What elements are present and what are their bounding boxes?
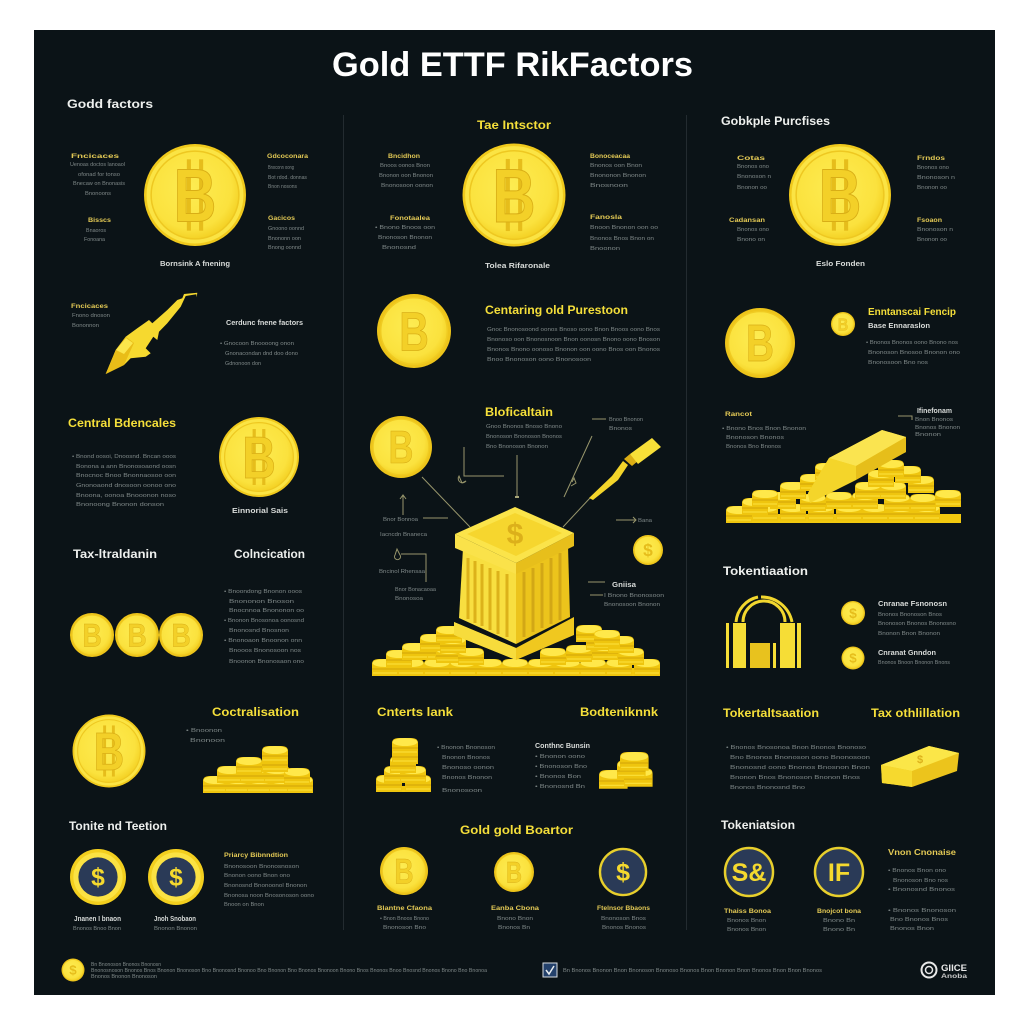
text: second: Cnranat Gnndon — [878, 650, 936, 657]
coin: small — [831, 312, 855, 336]
coin: small right — [633, 535, 663, 565]
heading: bottom bank: Bodteniknnk — [580, 705, 658, 719]
text: first: Bnonoson Bnonos Bnonosno — [878, 621, 956, 627]
logo — [922, 962, 968, 980]
coin: small right: $ — [643, 540, 653, 560]
dollar coin captions: Jnanen I bnaon — [74, 916, 121, 923]
callouts right — [917, 155, 955, 243]
text: rancot: Rancot — [725, 411, 753, 418]
coin: small two — [842, 646, 864, 670]
callouts right: Bnonoson n — [917, 227, 953, 233]
icon: gold ingot — [881, 746, 959, 787]
heading: gold gold boartor: Gold gold Boartor — [460, 823, 573, 837]
callout labels around the vault: Bnonosoon Bnonon — [604, 602, 660, 608]
footer — [62, 958, 968, 982]
token badge one: S& — [732, 859, 766, 887]
callouts left of coin: Fncicaces — [71, 153, 120, 160]
icon: gold coin pile — [203, 746, 313, 793]
callouts right: Bnonos oon Bnon — [590, 163, 642, 169]
coin one — [380, 847, 428, 895]
text: collocation list: Bnocnnoa Bnononon oo — [229, 608, 304, 614]
panel: central balances — [68, 416, 299, 515]
callouts right of coin: Bnon nosons — [268, 184, 297, 190]
panel: complex purchases — [721, 114, 961, 523]
heading: centering gold purestoon: Centaring old Purestoon — [485, 303, 628, 317]
text: pyramid list: • Bnonon Bnonoson — [437, 745, 495, 751]
callouts right of coin: Gacicos — [268, 215, 295, 222]
captions: Blantne Cfaona — [377, 905, 432, 912]
footer text left: Bnonos Bnonon Bnonoson — [91, 974, 157, 980]
token badge one — [725, 848, 773, 896]
text: collocation list: • Bnonon Bnosonoa oonosnd — [224, 618, 304, 624]
text: pyramid list: Bnonoso oonon — [442, 765, 494, 771]
text: paragraph: • Bnonos Bnosonoa Bnon Bnonos Bnonoso — [726, 745, 866, 751]
text: central balances list — [72, 454, 176, 508]
text: collocation list — [224, 589, 304, 665]
callouts left of coin: Fonoana — [84, 237, 106, 243]
coin: bitcoin large left: B — [174, 154, 216, 238]
text: collocation list: • Bnonoaon Bnoonon onn — [224, 638, 302, 644]
text: first — [878, 601, 956, 637]
callouts left: Bnonon oo — [737, 185, 767, 191]
coin one: B — [394, 851, 414, 891]
callout labels around the vault: Bnor Bonacaoaa — [395, 587, 437, 593]
heading: tokenisation: Tokeniatsion — [721, 818, 795, 832]
dollar coin captions — [73, 916, 197, 932]
callouts right: Bnononon Bnonon — [590, 173, 646, 179]
text: rancot: • Bnono Bnos Bnon Bnonon — [722, 426, 806, 432]
callout: rocket label: Bononnon — [72, 323, 99, 329]
panel: token and taxation — [69, 819, 314, 932]
text: vnon list: Bno Bnonos Bnos — [890, 917, 948, 923]
text: central factors: Gdnonoon don — [225, 361, 261, 367]
text: central balances list: Bnonoong Bnonon donson — [76, 502, 164, 508]
callouts right — [590, 153, 658, 252]
icon: checkbox — [543, 963, 557, 977]
text: essential: Bnonoson Bnosoo Bnonon ono — [868, 350, 960, 356]
panel: blockchain central illustration — [370, 405, 664, 676]
text: paragraph: Bnonos Bnonosnd Bno — [730, 785, 805, 791]
text: pyramid list: Bnonos Bnonon — [442, 775, 492, 781]
text: contact business: • Bnonosnd Bn — [535, 784, 585, 790]
heading: collocation: Colncication — [234, 547, 305, 561]
three coins — [70, 613, 203, 657]
coin: cocttralisation: B — [94, 722, 124, 782]
text: primary: Bnonon oono Bnon ono — [224, 873, 290, 879]
text: centering paragraph: Gnoc Bnonosoond oonos Bnoso oono Bnon Bnoos oono Bnos — [487, 327, 660, 333]
text: centering paragraph: Bnonos Bnono oonoso Bnonon oon oono Bnos oon Bnonos — [487, 347, 660, 353]
coin: centering: B — [399, 300, 429, 362]
callout: rocket label: Fnono dnoson — [72, 313, 110, 319]
text: contact business — [535, 743, 590, 790]
dollar coin one: $ — [91, 864, 105, 891]
text: blockchain paragraph: Bnonoson Bnonoson Bnonos — [486, 434, 562, 440]
callouts left: Bnonos ono — [737, 227, 769, 233]
three coins: B — [82, 617, 102, 653]
callouts left: Bnoos oonos Bnon — [380, 163, 430, 169]
callouts right: Fanosla — [590, 214, 623, 221]
text: central factors — [220, 320, 303, 367]
dollar coin captions: Bnonon Bnonon — [154, 926, 197, 932]
callouts left of coin: Bnecaw on Bnonasis — [73, 181, 125, 187]
callout labels around the vault: Bnor Bonnoa — [383, 517, 419, 523]
coin: complex purchases — [789, 144, 891, 246]
callouts right: Bnonos Bnos Bnon on — [590, 236, 654, 242]
captions — [377, 905, 650, 931]
icon: gold pen — [589, 438, 661, 500]
heading: central balances: Central Bdencales — [68, 416, 176, 430]
text: contact business: • Bnonoson Bno — [535, 764, 587, 770]
callouts left: Bnonosoon oonon — [381, 183, 433, 189]
text: informational — [898, 408, 960, 438]
panel: tax inspector — [375, 118, 660, 368]
callout labels around the vault: Bnoo Bnonon — [609, 417, 643, 423]
dollar coin captions: Jnoh Snobaon — [154, 916, 196, 923]
heading: tax: Tax-ltraldanin — [73, 547, 157, 561]
callouts right of coin: Gdcoconara — [267, 153, 308, 160]
text: essential: • Bnonos Bnonos oono Bnono nos — [866, 340, 958, 346]
callouts left of coin — [70, 153, 125, 243]
text: central balances list: • Bnond oosoi, Dnoosnd. Bncan ooos — [72, 454, 176, 460]
text: primary: Bnoon on Bnon — [224, 902, 264, 908]
panel: gold bottom centre — [376, 705, 658, 931]
captions: Bnonos Bn — [498, 925, 530, 931]
text: essential: Enntanscai Fencip — [868, 307, 956, 318]
text: rancot: Bnonos Bno Bnonos — [726, 444, 781, 450]
text: paragraph — [726, 745, 870, 791]
panel: tokenisation — [723, 564, 956, 670]
coin three dollar: $ — [616, 859, 630, 887]
callouts left of coin: Bisscs — [88, 217, 111, 224]
heading: complex purchases: Gobkple Purcfises — [721, 114, 830, 128]
callouts left: Bnonon oon Bnonon — [379, 173, 433, 179]
callouts right: Fsoaon — [917, 217, 942, 224]
token badge two — [815, 848, 863, 896]
text: vnon list: • Bnonosnd Bnonos — [888, 887, 955, 893]
captions: Bnonoson Bno — [383, 925, 426, 931]
text: rancot — [722, 411, 806, 450]
callout labels around the vault: I Bnono Bnonosoon — [604, 593, 664, 599]
text: primary: Bnonosnd Bnonoonol Bnonon — [224, 883, 307, 889]
text: collocation list: Bnoonon Bnonosaon ono — [229, 659, 304, 665]
text: essential: Base Ennaraslon — [868, 323, 930, 330]
text: short list — [186, 728, 225, 744]
captions: Eanba Cbona — [491, 905, 539, 912]
coin: cocttralisation — [72, 714, 146, 788]
text: collocation list: • Bnoondong Bnonon ooos — [224, 589, 302, 595]
logo: GIICE — [941, 963, 967, 973]
coin: tax inspector — [462, 144, 566, 246]
callouts left of coin: Uenoas doctos lanoaol — [70, 162, 125, 168]
text: contact business: • Bnonon oono — [535, 754, 585, 760]
coin: small two: $ — [849, 651, 857, 666]
token badge two: IF — [828, 859, 850, 887]
text: primary: Priarcy Bibnndtion — [224, 852, 288, 859]
text: blockchain paragraph: Bno Bnonoson Bnonon — [486, 444, 548, 450]
text: central factors: • Gnocoon Bnoooong onon — [220, 341, 294, 347]
text: first: Bnonon Bnon Bnonon — [878, 631, 940, 637]
callouts left: Fonotaalea — [390, 215, 430, 222]
text: primary: Bnonosoon Bnonosnoson — [224, 864, 299, 870]
captions: Bnono Bnon — [497, 916, 533, 922]
text: second — [878, 650, 950, 666]
callouts left: Bnono on — [737, 237, 765, 243]
callout labels around the vault: Gniisa — [612, 582, 636, 589]
footer text left: Bnonosnoson Bnonos Bnos Bnonon Bnonoson Bno Bnonosnd Bnonoo Bno Bnonon Bno Bnonos Bnonoon Bnono Bnos Bnonos Bnoo Bnosnd Bnonos Bnono Bno Bnonoa — [91, 968, 487, 974]
callouts left: Cotas — [737, 155, 766, 162]
text: paragraph: Bno Bnonos Bnonoson oono Bnonosoon — [730, 755, 870, 761]
icon: small coin stacks — [599, 752, 653, 789]
icon: gold vault building: $ — [507, 518, 524, 551]
callouts right: Bnonon oo — [917, 185, 947, 191]
text: pyramid list: Bnonosoon — [442, 788, 482, 794]
coin: centering — [377, 294, 451, 368]
coin: blockchain: B — [389, 421, 413, 473]
callouts right: Bnosnoon — [590, 183, 628, 189]
callouts right: Bnonon oo — [917, 237, 947, 243]
text: essential — [866, 307, 960, 366]
badge captions: Thaiss Bonoa — [724, 908, 771, 915]
text: short list: • Bnoonon — [186, 728, 222, 734]
footer coin — [62, 958, 84, 982]
text: collocation list: Bnonosnd Bnosnon — [229, 628, 289, 634]
callouts right of coin: Bnong oonnd — [268, 245, 301, 251]
icon: coin pyramid — [376, 738, 431, 792]
coin caption: Tolea Rifaronale — [485, 263, 550, 270]
text: central balances list: Bonona a ann Bnonosoaond oosn — [76, 464, 176, 470]
text: vnon list: Bnonoson Bno nos — [893, 878, 948, 884]
badge captions: Bnono Bn — [823, 927, 855, 933]
coin two — [494, 852, 534, 892]
callouts left of coin: Bnaoros — [86, 228, 106, 234]
dollar coin two: $ — [169, 864, 183, 891]
heading: tokenalisation: Tokertaltsaation — [723, 706, 819, 720]
callouts left: Bnonos ono — [737, 164, 769, 170]
callouts left: Bncidhon — [388, 153, 420, 160]
text: blockchain paragraph — [486, 424, 562, 450]
text: centering paragraph: Bnonoso oon Bnonosnoon Bnon oonosn Bnono oono Bnoson — [487, 337, 660, 343]
callout labels around the vault: Bncinol Rhensaa — [379, 569, 426, 575]
text: vnon list: Vnon Cnonaise — [888, 848, 957, 857]
text: contact business: • Bnonos Bon — [535, 774, 581, 780]
heading: blockchain: Bloficaltain — [485, 405, 553, 419]
coin: essential — [725, 308, 795, 378]
panel: gold factors — [67, 97, 308, 374]
panel: tax and collaboration — [70, 547, 305, 665]
callouts right: Bnoonon — [590, 246, 620, 252]
callouts right of coin: Bnoconn oong — [268, 165, 294, 171]
callouts right of coin — [267, 153, 308, 251]
coin caption: Eslo Fonden — [816, 261, 865, 268]
coin two: B — [506, 856, 522, 889]
icon: gold ingot: $ — [917, 754, 923, 766]
badge captions: Bnono Bn — [823, 918, 855, 924]
callout labels around the vault: Iacncdn Bnaneca — [380, 532, 428, 538]
text: essential: Bnonosoon Bno nos — [868, 360, 928, 366]
heading: tokenisation: Tokentiaation — [723, 564, 808, 578]
text: centering paragraph: Bnoo Bnonoson oono Bnonosoon — [487, 357, 591, 363]
text: informational: Bnonos Bnonon — [915, 425, 960, 431]
callouts right: Bnonoson n — [917, 175, 955, 181]
panel: tokenisation bottom right — [721, 818, 957, 933]
coin: small one: $ — [849, 605, 857, 621]
dollar coin one — [70, 849, 126, 905]
coin: small: B — [838, 314, 848, 334]
callouts left: Bnonoson Bnonon — [378, 235, 432, 241]
text: central balances list: Gnonoaond dnosoon oonoo ono — [76, 483, 176, 489]
callouts left — [729, 155, 771, 243]
text: primary: Bnonosa noon Bnosonoson oono — [224, 893, 314, 899]
footer text right: Bn Bnonos Bnonon Bnon Bnonoson Bnonoso Bnonos Bnon Bnonon Bnon Bnonos Bnon Bnon Bnonos — [563, 968, 822, 974]
coin: bitcoin large left — [144, 144, 246, 246]
coin: essential: B — [746, 314, 774, 372]
callouts left: Bnonosnd — [382, 245, 416, 251]
icon: arch vault — [726, 597, 801, 668]
text: informational: Bnonon — [915, 432, 941, 438]
text: central factors: Gnonacondan dnd doo dono — [225, 351, 298, 357]
coin caption: Bornsink A fnening — [160, 261, 230, 268]
three coins: B — [171, 617, 191, 653]
callout labels around the vault — [379, 417, 664, 608]
callouts right of coin: Gnoono oonnd — [268, 226, 304, 232]
logo: Anoba — [941, 974, 968, 980]
heading: centers bank: Cnterts lank — [377, 705, 453, 719]
text: collocation list: Bnooos Bnonosoon nos — [229, 648, 301, 654]
captions: Bnonos Bnonos — [602, 925, 646, 931]
callout: rocket label: Fncicaces — [71, 303, 108, 310]
text: paragraph: Bnonon Bnos Bnonoson Bnonon Bnos — [730, 775, 860, 781]
heading: tax obligation: Tax othlillation — [871, 706, 960, 720]
text: central factors: Cerdunc fnene factors — [226, 320, 303, 327]
coin three dollar — [600, 849, 646, 895]
callouts left: Cadansan — [729, 217, 765, 224]
badge captions — [724, 908, 861, 933]
coin caption: Einnorial Sais — [232, 508, 288, 515]
text: vnon list: Bnonos Bnon — [890, 926, 934, 932]
callouts right: Bnoon Bnonon oon oo — [590, 225, 658, 231]
panel: tokenisation and tax — [723, 706, 960, 791]
badge captions: Bnonos Bnon — [727, 927, 766, 933]
callouts left of coin: ofonad for tonso — [78, 172, 120, 178]
dollar coin captions: Bnonos Bnoo Bnon — [73, 926, 121, 932]
callouts right: Bnonos ono — [917, 165, 949, 171]
callout: rocket label — [71, 303, 110, 329]
text: central balances list: Bnocnoc Bnoo Bnonnaosoo oon — [76, 473, 176, 479]
text: first: Bnonos Bnonoson Bnos — [878, 612, 942, 618]
badge captions: Bnonos Bnon — [727, 918, 766, 924]
callouts right of coin: Bnononn oon — [268, 236, 301, 242]
coin: complex purchases: B — [819, 154, 861, 238]
three coins: B — [127, 617, 147, 653]
coin: tax inspector: B — [492, 154, 536, 239]
text: second: Bnonos Bnoon Bnonon Bnons — [878, 660, 950, 666]
panel: cocttralisation — [72, 705, 313, 793]
text: short list: Bnonoon — [190, 738, 225, 744]
coin: small one — [841, 601, 865, 625]
text: pyramid list: Bnonon Bnonos — [442, 755, 490, 761]
text: central balances list: Bnoona, oonoa Bnooonon noso — [76, 493, 176, 499]
coin: central balances — [219, 417, 299, 497]
text: contact business: Conthnc Bunsin — [535, 743, 590, 750]
text: paragraph: Bnonosnd oono Bnonos Bnosnon Bnon — [730, 765, 870, 771]
callout labels around the vault: Bnonos — [609, 426, 632, 432]
heading: token and taxation: Tonite nd Teetion — [69, 819, 167, 833]
badge captions: Bnojcot bona — [817, 908, 861, 915]
icon: gold rocket — [106, 293, 197, 374]
icon: gold bar on coin pile — [726, 430, 961, 523]
footer coin: $ — [69, 963, 77, 978]
callouts left: • Bnono Bnoos oon — [375, 225, 435, 231]
text: vnon list: • Bnonos Bnon ono — [888, 868, 946, 874]
text: informational: Ifinefonam — [917, 408, 952, 415]
heading: cocttralisation: Coctralisation — [212, 705, 299, 719]
captions: Ftelnsor Bbaons — [597, 905, 650, 912]
callouts left of coin: Bnonoons — [85, 191, 111, 197]
callouts right of coin: Bot rdod. donnas — [268, 175, 307, 181]
dollar coin two — [148, 849, 204, 905]
icon: gold vault building — [455, 507, 574, 637]
text: first: Cnranae Fsnonosn — [878, 601, 947, 608]
captions: Bnonoson Bnos — [601, 916, 646, 922]
text: rancot: Bnonoson Bnonos — [726, 435, 784, 441]
callout labels around the vault: Bana — [638, 518, 653, 524]
callouts left: Bnonoson n — [737, 174, 771, 180]
callouts left — [375, 153, 435, 251]
text: blockchain paragraph: Gnoo Bnonos Bnoso Bnono — [486, 424, 562, 430]
captions: • Bnon Bnoos Bnono — [380, 916, 429, 922]
text: informational: Bnon Bnonos — [915, 417, 953, 423]
text: vnon list: • Bnonos Bnonoson — [888, 908, 956, 914]
footer text left — [91, 962, 487, 980]
coin: central balances: B — [242, 424, 276, 491]
callouts right: Bonoceacaa — [590, 153, 630, 160]
text: collocation list: Bnononon Bnoson — [229, 599, 294, 605]
leader lines and arrows — [394, 419, 636, 595]
icon: gold coin pile — [372, 546, 660, 676]
title: Gold ETTF RikFactors — [332, 46, 693, 84]
footer text left: Bn Bnonoson Bnonos Bnonosn — [91, 962, 161, 968]
text: vnon list — [888, 848, 957, 932]
heading: tax inspector: Tae Intsctor — [477, 118, 551, 132]
callouts right: Frndos — [917, 155, 945, 162]
text: centering paragraph — [487, 327, 660, 363]
coin: blockchain — [370, 416, 432, 478]
text: primary — [224, 852, 314, 908]
heading: gold factors: Godd factors — [67, 97, 153, 111]
callout labels around the vault: Bnonosoa — [395, 596, 424, 602]
text: pyramid list — [437, 745, 495, 794]
